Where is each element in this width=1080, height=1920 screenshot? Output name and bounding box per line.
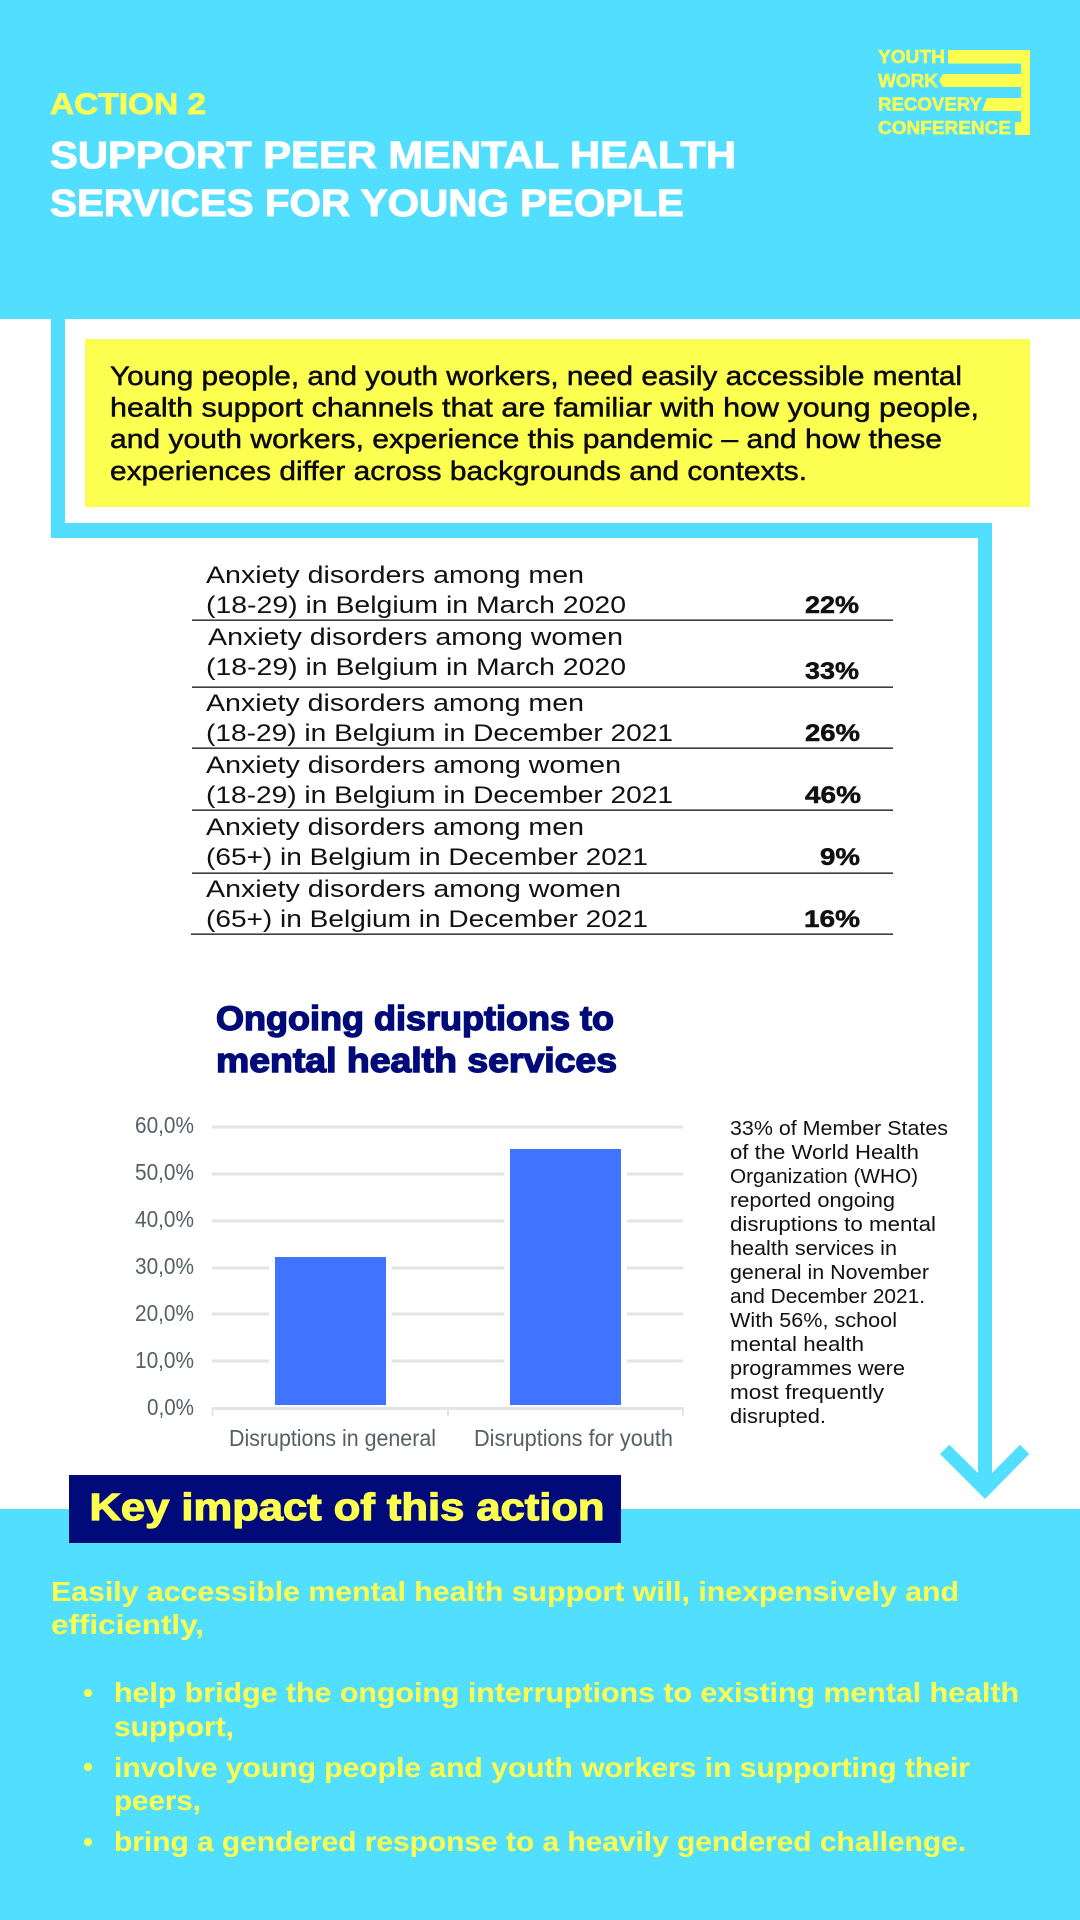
logo: Youth Work Recovery Conference: YOUTH xyxy=(878,46,945,67)
text block: WHO disruption note: and December 2021. xyxy=(730,1286,925,1308)
bar chart: ongoing disruptions xyxy=(135,1112,684,1451)
panel: intro callout: experiences differ across backgrounds and contexts. xyxy=(110,456,807,486)
table row: women 65+ December 2021 xyxy=(191,876,893,935)
table row: women 18-29 December 2021 xyxy=(192,752,893,811)
table row: men 18-29 December 2021 xyxy=(192,690,893,749)
table row: women 18-29 March 2020: Anxiety disorders among women xyxy=(208,624,623,651)
table row: men 18-29 December 2021: 26% xyxy=(805,720,860,747)
text block: WHO disruption note: disrupted. xyxy=(730,1406,826,1428)
title: SERVICES FOR YOUNG PEOPLE xyxy=(50,183,684,225)
logo: Youth Work Recovery Conference: WORK xyxy=(878,70,939,91)
table row: men 18-29 March 2020: 22% xyxy=(805,592,859,619)
panel: header xyxy=(0,0,1080,319)
text block: WHO disruption note: disruptions to mental xyxy=(730,1214,936,1236)
logo: Youth Work Recovery Conference xyxy=(878,46,1030,138)
text block: WHO disruption note: general in November xyxy=(730,1262,929,1284)
text block: WHO disruption note: reported ongoing xyxy=(730,1190,895,1212)
table row: men 18-29 March 2020 xyxy=(192,562,893,621)
text block: WHO disruption note: most frequently xyxy=(730,1382,884,1404)
table row: women 65+ December 2021: Anxiety disorders among women xyxy=(206,876,621,903)
list: key impacts: support, xyxy=(114,1711,234,1742)
table row: women 18-29 December 2021: 46% xyxy=(805,782,861,809)
text block: key impact intro xyxy=(51,1576,959,1640)
panel: intro callout: health support channels that are familiar with how young people, xyxy=(110,392,979,422)
chart axis labels: 60,0% xyxy=(135,1112,194,1138)
table row: men 65+ December 2021: Anxiety disorders among men xyxy=(206,814,584,841)
text block: WHO disruption note: health services in xyxy=(730,1238,897,1260)
text block: WHO disruption note: programmes were xyxy=(730,1358,905,1380)
heading: key impact of this action: Key impact of this action xyxy=(90,1487,604,1529)
chart axis labels: 30,0% xyxy=(135,1253,194,1279)
title xyxy=(50,135,736,225)
table row: women 18-29 December 2021: Anxiety disorders among women xyxy=(206,752,621,779)
table row: women 18-29 December 2021: (18-29) in Belgium in December 2021 xyxy=(206,782,673,809)
heading: chart title: mental health services xyxy=(216,1042,617,1080)
bar: disruptions for youth xyxy=(510,1149,621,1405)
logo: Youth Work Recovery Conference: CONFERENCE xyxy=(878,117,1011,138)
bar: disruptions in general xyxy=(275,1257,386,1405)
panel: intro callout xyxy=(85,339,1030,507)
panel: key impact xyxy=(0,1475,1080,1920)
heading: chart title xyxy=(216,1000,617,1080)
text block: key impact intro: Easily accessible mental health support will, inexpensively and xyxy=(51,1576,959,1607)
table: anxiety disorders statistics xyxy=(191,562,893,935)
text block: WHO disruption note xyxy=(730,1118,948,1428)
table row: men 18-29 December 2021: Anxiety disorders among men xyxy=(206,690,584,717)
table row: men 18-29 December 2021: (18-29) in Belgium in December 2021 xyxy=(206,720,673,747)
text block: WHO disruption note: 33% of Member States xyxy=(730,1118,948,1140)
table row: women 65+ December 2021: (65+) in Belgium in December 2021 xyxy=(206,906,648,933)
text block: WHO disruption note: of the World Health xyxy=(730,1142,919,1164)
chart axis labels: 0,0% xyxy=(147,1394,194,1420)
list: key impacts: involve young people and youth workers in supporting their xyxy=(114,1752,970,1783)
text block: WHO disruption note: With 56%, school xyxy=(730,1310,897,1332)
chart axis labels: Disruptions in general xyxy=(229,1425,436,1451)
table row: men 65+ December 2021: 9% xyxy=(820,844,860,871)
chart axis labels: 20,0% xyxy=(135,1300,194,1326)
list: key impacts xyxy=(84,1677,1019,1857)
table row: women 65+ December 2021: 16% xyxy=(804,906,860,933)
table row: women 18-29 March 2020: 33% xyxy=(805,658,859,685)
table row: men 18-29 March 2020: (18-29) in Belgium in March 2020 xyxy=(206,592,626,619)
table row: men 18-29 March 2020: Anxiety disorders among men xyxy=(206,562,584,589)
chart axis labels: 40,0% xyxy=(135,1206,194,1232)
list: key impacts: bring a gendered response to a heavily gendered challenge. xyxy=(114,1826,966,1857)
table row: men 65+ December 2021: (65+) in Belgium in December 2021 xyxy=(206,844,648,871)
chart axis labels: Disruptions for youth xyxy=(474,1425,673,1451)
heading: key impact of this action xyxy=(69,1475,621,1543)
chart axis labels xyxy=(135,1112,673,1451)
list: key impacts: help bridge the ongoing interruptions to existing mental health xyxy=(114,1677,1019,1708)
table row: women 18-29 March 2020: (18-29) in Belgium in March 2020 xyxy=(206,654,626,681)
heading: action label: ACTION 2 xyxy=(50,88,206,121)
text block: WHO disruption note: Organization (WHO) xyxy=(730,1166,918,1188)
chart axis labels: 50,0% xyxy=(135,1159,194,1185)
text block: key impact intro: efficiently, xyxy=(51,1609,204,1640)
heading: chart title: Ongoing disruptions to xyxy=(216,1000,614,1038)
list: key impacts: peers, xyxy=(114,1785,201,1816)
arrow: connector from header to key impact xyxy=(51,319,1029,1499)
logo: Youth Work Recovery Conference: RECOVERY xyxy=(878,94,983,114)
table row: women 18-29 March 2020 xyxy=(192,624,893,688)
table row: men 65+ December 2021 xyxy=(192,814,893,874)
chart axis labels: 10,0% xyxy=(135,1347,194,1373)
panel: intro callout: and youth workers, experience this pandemic – and how these xyxy=(110,424,942,454)
panel: intro callout: Young people, and youth workers, need easily accessible mental xyxy=(110,361,962,391)
text block: WHO disruption note: mental health xyxy=(730,1334,864,1356)
title: SUPPORT PEER MENTAL HEALTH xyxy=(50,135,736,177)
